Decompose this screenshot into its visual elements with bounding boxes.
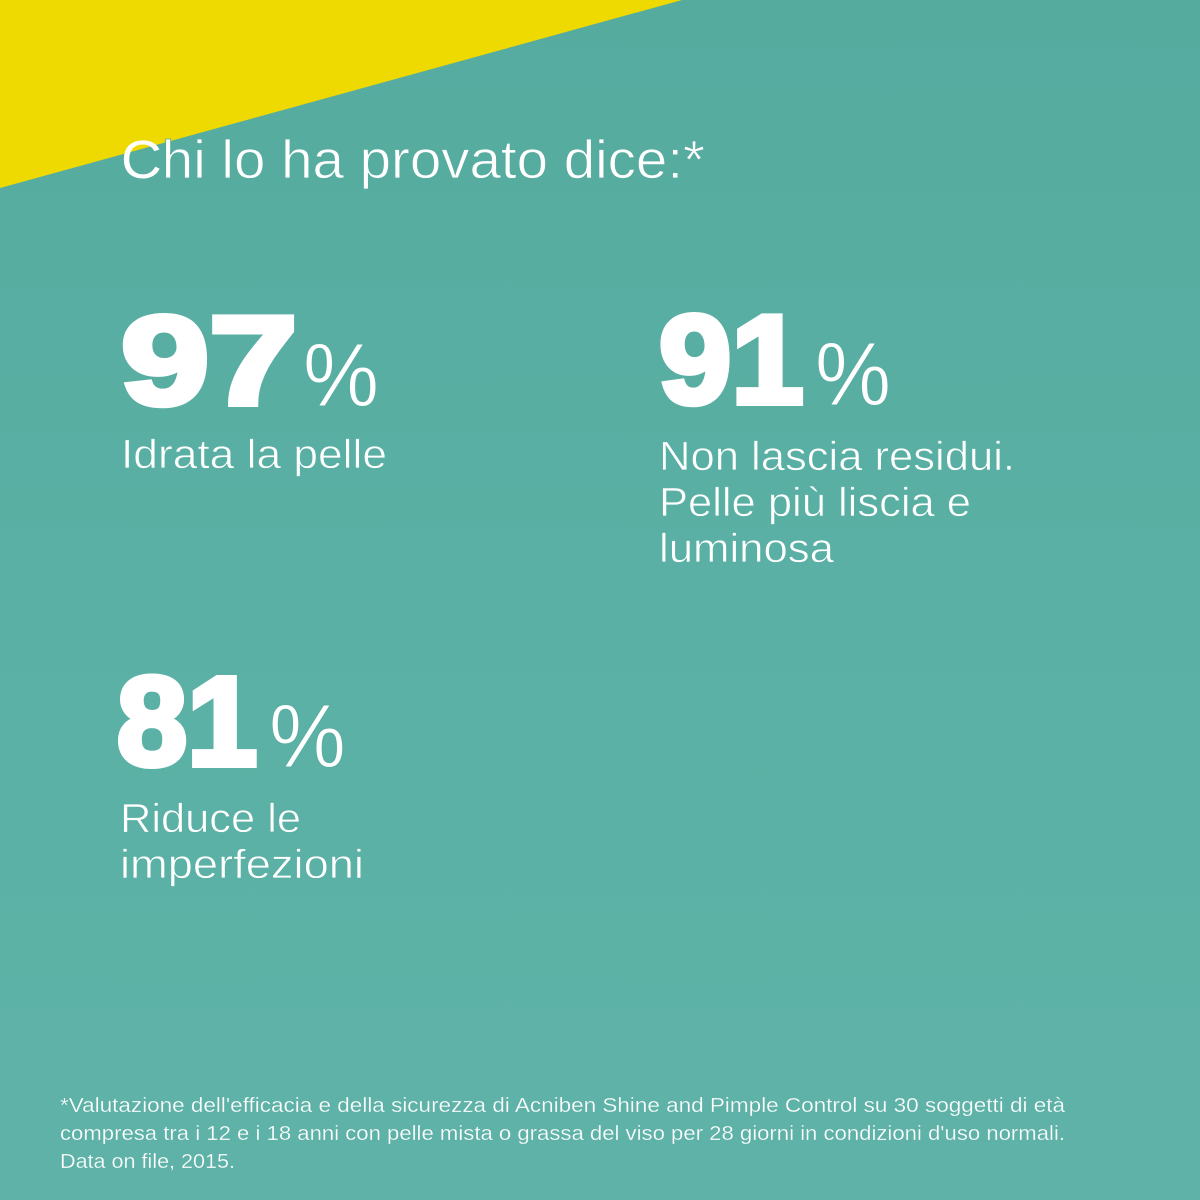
label: Non lascia residui xyxy=(659,433,1015,571)
percent sign: % xyxy=(269,685,346,786)
number 91: 91 xyxy=(659,290,804,431)
title: Chi lo ha provato dice:* xyxy=(121,130,705,190)
label: Riduce le imperfezioni: imperfezioni xyxy=(120,841,364,887)
label: Riduce le imperfezioni: Riduce le xyxy=(120,795,301,841)
footnote: Data on file, 2015. xyxy=(60,1151,235,1173)
label: Idrata la pelle: Idrata la pelle xyxy=(121,431,387,477)
label: Non lascia residui: luminosa xyxy=(659,525,834,571)
stat: 97% xyxy=(121,290,387,477)
percent sign: % xyxy=(815,324,891,424)
label: Non lascia residui: Non lascia residui. xyxy=(659,433,1015,479)
label: Riduce le imperfezioni xyxy=(120,795,364,887)
label: Non lascia residui: Pelle più liscia e xyxy=(659,479,971,525)
footnote xyxy=(60,1095,1066,1173)
stat: 81% xyxy=(117,651,364,887)
stat: 91% xyxy=(659,290,1015,571)
percent sign: % xyxy=(303,325,379,425)
footnote: compresa tra i 12 e i 18 anni con pelle mista o grassa del viso per 28 giorni in condizioni d'uso normali. xyxy=(60,1123,1065,1145)
footnote: *Valutazione dell'efficacia e della sicurezza di Acniben Shine and Pimple Control su 30 soggetti di età xyxy=(60,1095,1066,1117)
yellow corner triangle xyxy=(0,0,682,188)
number 81: 81 xyxy=(117,651,257,792)
number 97: 97 xyxy=(121,290,297,431)
